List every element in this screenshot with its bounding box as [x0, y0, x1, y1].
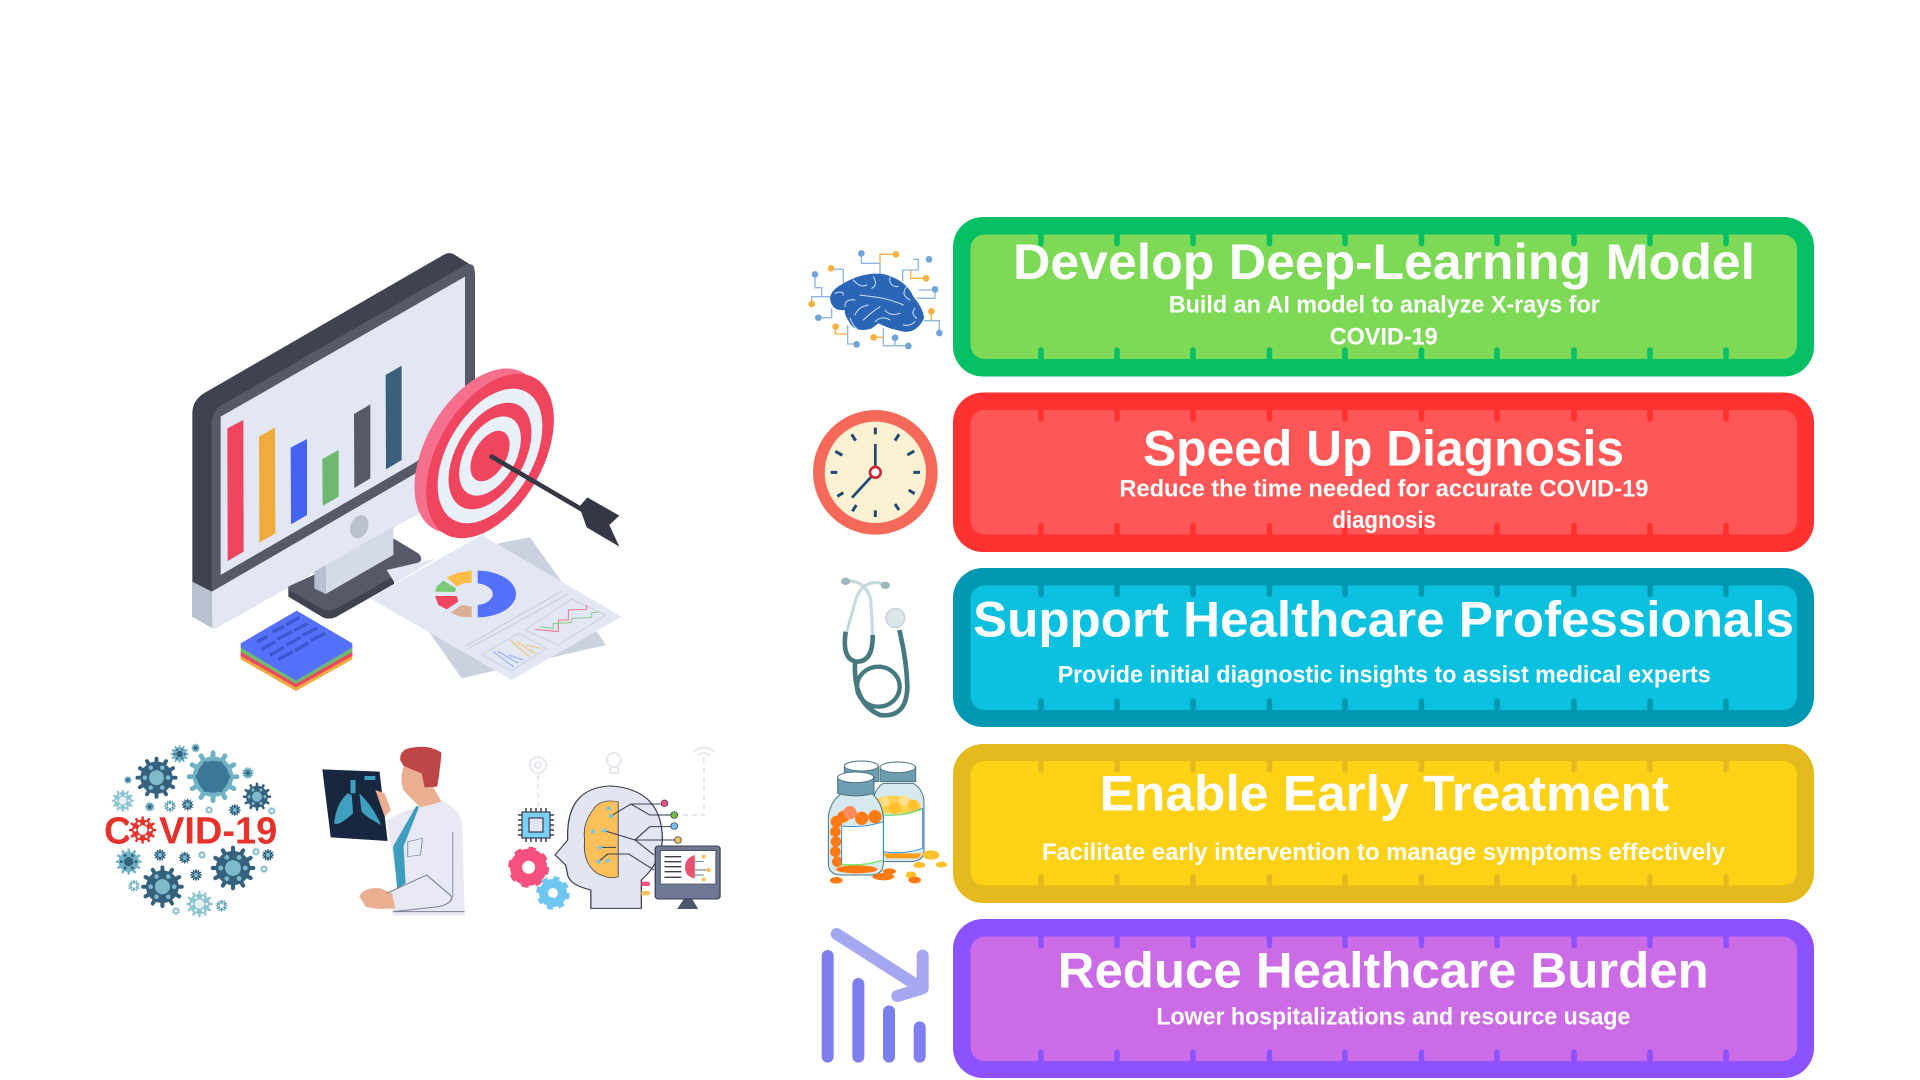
description: Provide initial diagnostic insights to assist medical experts [1058, 662, 1711, 689]
illustration: ai head with circuit brain [511, 748, 720, 909]
illustration: doctor examining lung x-ray [322, 747, 465, 916]
target [388, 347, 580, 560]
icon: covid-19 virus cluster [104, 744, 277, 916]
heading: Speed Up Diagnosis [1143, 421, 1624, 477]
doctor figure [359, 747, 465, 916]
mini monitor [655, 846, 720, 909]
description [1119, 476, 1648, 534]
monitor stand [288, 527, 437, 619]
report sheets [370, 535, 622, 680]
heading: Enable Early Treatment [1100, 766, 1669, 822]
icon: declining bar chart with arrow [828, 934, 923, 1057]
description: COVID-19 [1330, 323, 1438, 350]
panel: reduce healthcare burden [953, 919, 1814, 1078]
panel: enable early treatment [953, 744, 1814, 903]
heading: Develop Deep-Learning Model [1013, 234, 1755, 290]
heading: Reduce Healthcare Burden [1058, 943, 1709, 999]
heading: Support Healthcare Professionals [973, 592, 1794, 648]
virus particles [113, 744, 275, 916]
description: Lower hospitalizations and resource usage [1156, 1003, 1630, 1030]
description [1169, 291, 1600, 350]
icon: stethoscope [841, 578, 907, 715]
panel: support healthcare professionals [953, 568, 1814, 727]
x-ray film [322, 769, 388, 841]
covid-19 label: VID-19 [159, 810, 277, 852]
description: Facilitate early intervention to manage symptoms effectively [1042, 839, 1726, 866]
faint tech icons [530, 748, 714, 815]
covid-19 label: C [104, 810, 131, 852]
head and circuit [555, 786, 681, 908]
report mini charts [466, 591, 606, 671]
illustration: monitor with target and reports [192, 253, 622, 691]
covid-19 label: O [128, 810, 158, 852]
stack of layers [241, 611, 352, 691]
icon: microchip [518, 808, 554, 842]
back bottle [844, 761, 878, 782]
monitor body [192, 253, 475, 628]
icon: clock [813, 410, 938, 535]
description: diagnosis [1332, 507, 1436, 534]
panel: speed up diagnosis [953, 392, 1814, 552]
arrow [492, 457, 619, 547]
donut chart [435, 571, 516, 617]
virus letter O [127, 814, 159, 846]
monitor bar chart [227, 366, 402, 561]
description: Reduce the time needed for accurate COVID-19 [1119, 476, 1648, 503]
icon: pill bottles [828, 761, 947, 884]
description: Build an AI model to analyze X-rays for [1169, 291, 1600, 318]
icon: blue gear [538, 878, 568, 908]
scattered pills [830, 850, 947, 884]
icon: pink gear [511, 849, 547, 885]
icon: brain with circuits [808, 250, 943, 349]
right bottle [873, 762, 924, 862]
front bottle [828, 772, 883, 875]
panel: develop deep-learning model [953, 217, 1814, 376]
